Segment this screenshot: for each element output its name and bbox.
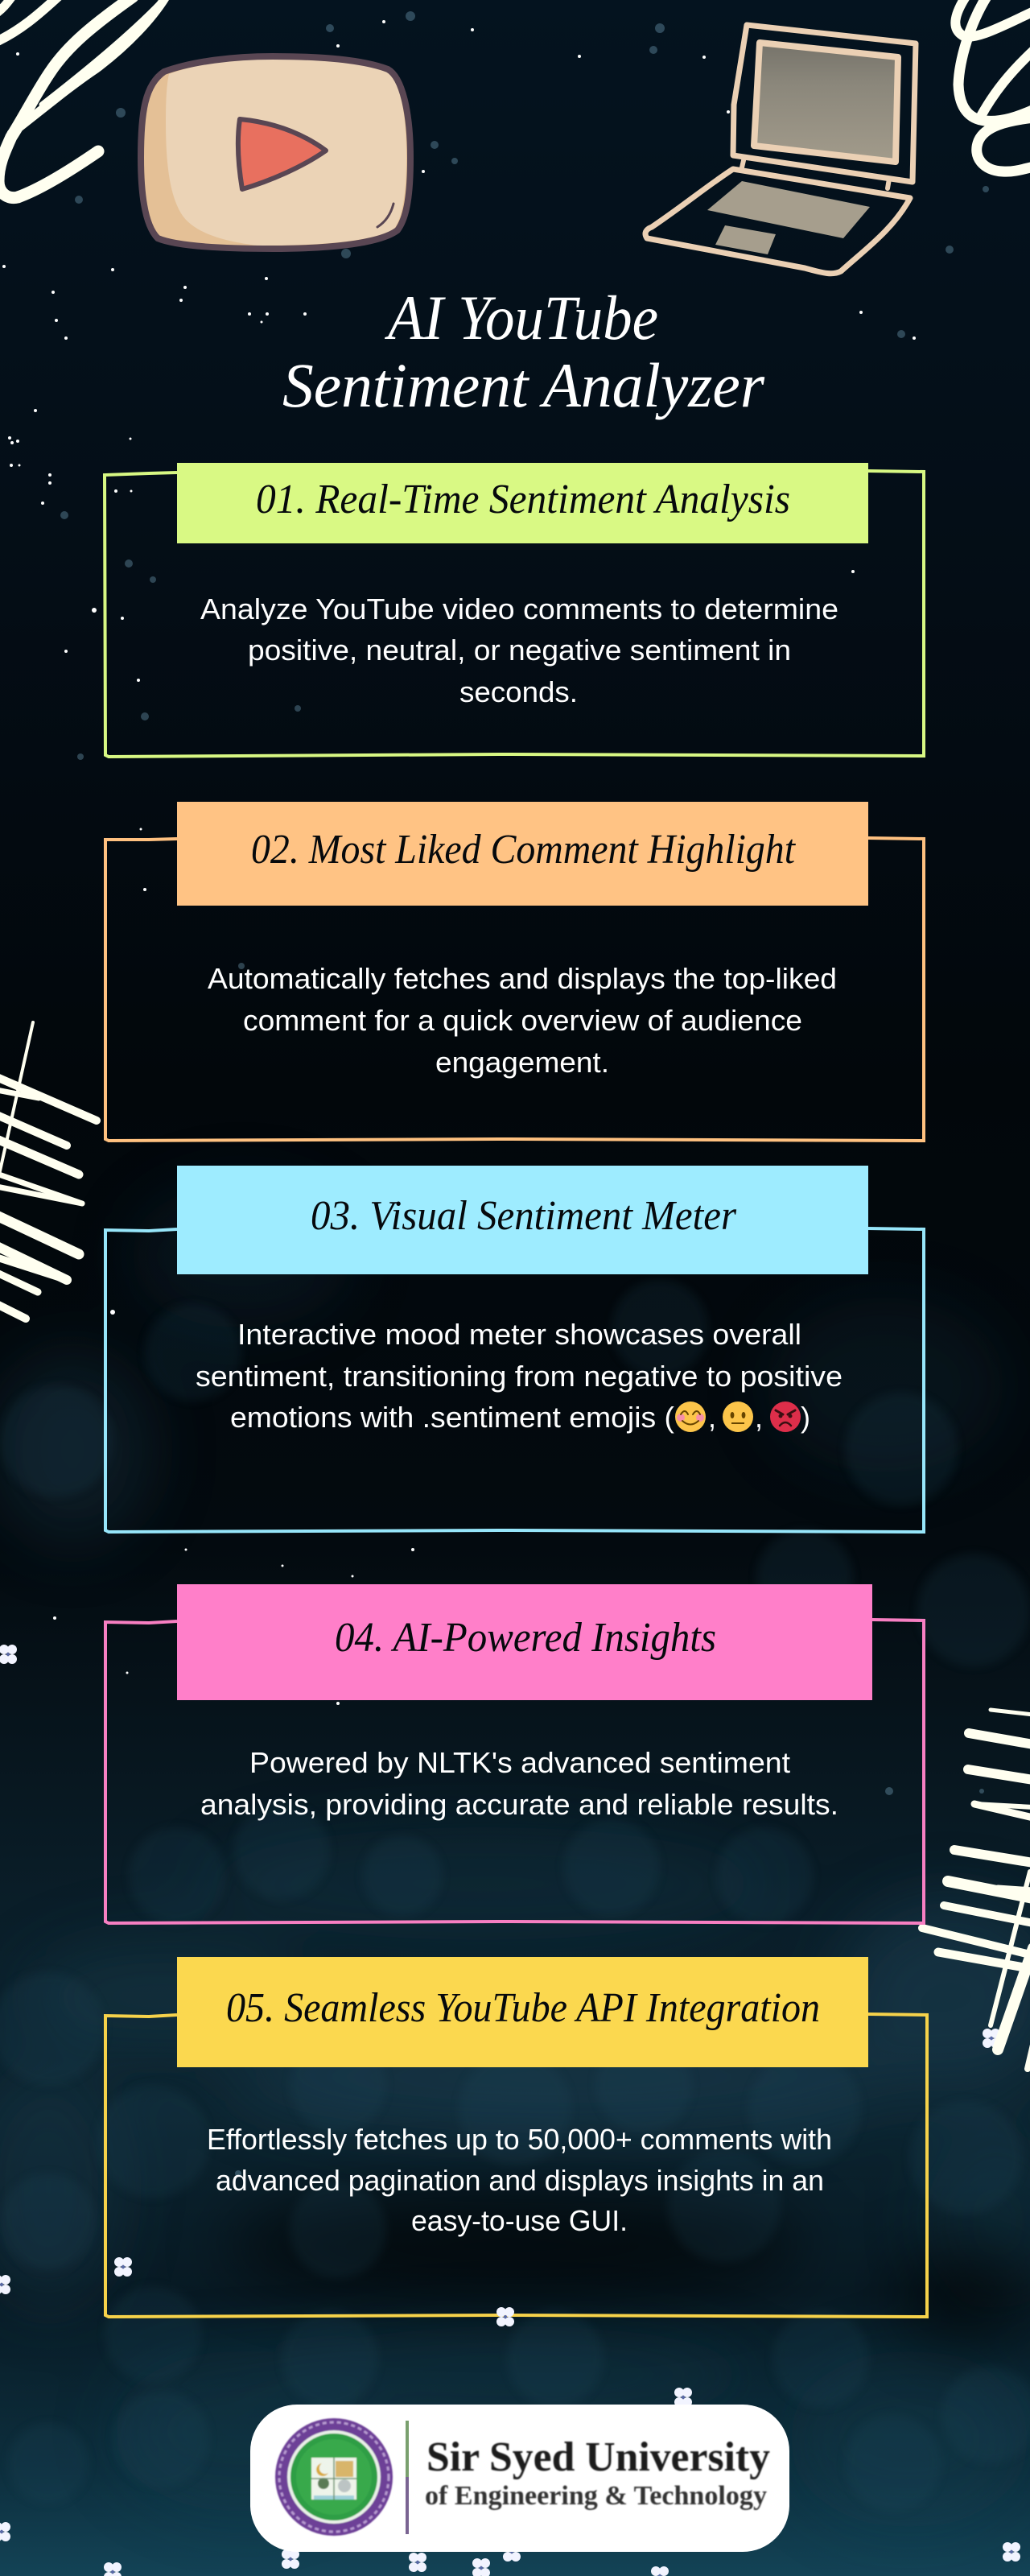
header 1 bbox=[177, 463, 868, 543]
body 1: Analyze YouTube video comments to determine bbox=[200, 592, 838, 625]
icon: YouTube play button bbox=[141, 56, 410, 249]
body 2: comment for a quick overview of audience bbox=[243, 1004, 802, 1037]
heading 3: 03. Visual Sentiment Meter bbox=[311, 1193, 737, 1239]
logo wordmark bbox=[425, 2434, 770, 2511]
header 3 bbox=[177, 1166, 868, 1274]
body 3: , bbox=[755, 1401, 763, 1434]
panel 2: Most Liked Comment Highlight bbox=[105, 802, 924, 1141]
body 3: emotions with .sentiment emojis ( bbox=[230, 1401, 674, 1434]
laptop screen bbox=[754, 43, 898, 162]
decorative scribble: top right bbox=[955, 0, 1030, 171]
icon: university seal bbox=[275, 2418, 393, 2536]
heading 2: 02. Most Liked Comment Highlight bbox=[251, 827, 796, 873]
decorative scribble: top left bbox=[0, 0, 166, 198]
header 5 bbox=[177, 1957, 868, 2067]
body 1: positive, neutral, or negative sentiment in bbox=[248, 634, 791, 667]
laptop base bbox=[645, 169, 910, 274]
body 5 bbox=[207, 2123, 832, 2237]
decorative scribble: left fan bbox=[0, 1022, 97, 1319]
body 4: Powered by NLTK's advanced sentiment bbox=[249, 1746, 790, 1779]
logo wordmark: of Engineering & Technology bbox=[425, 2481, 767, 2511]
title: Sentiment Analyzer bbox=[282, 350, 765, 420]
divider bbox=[406, 2421, 409, 2534]
body 3 bbox=[196, 1318, 843, 1434]
body 2: engagement. bbox=[435, 1046, 609, 1079]
heading 1: 01. Real-Time Sentiment Analysis bbox=[256, 477, 790, 522]
body 4 bbox=[200, 1746, 838, 1821]
body 3: sentiment, transitioning from negative to positive bbox=[196, 1360, 843, 1393]
body 2 bbox=[208, 962, 837, 1079]
decorative scribble: right fan bbox=[922, 1710, 1030, 2069]
panel 4: AI-Powered Insights bbox=[105, 1584, 924, 1923]
icon: angry emoji bbox=[770, 1402, 801, 1432]
body 3: , bbox=[708, 1401, 716, 1434]
panel 1: Real-Time Sentiment Analysis bbox=[105, 463, 924, 757]
body 2: Automatically fetches and displays the top-liked bbox=[208, 962, 837, 995]
panel 5: Seamless YouTube API Integration bbox=[105, 1957, 927, 2317]
body 5: easy-to-use GUI. bbox=[411, 2204, 628, 2237]
body 1 bbox=[200, 592, 838, 708]
body 1: seconds. bbox=[459, 675, 578, 708]
icon: play triangle bbox=[238, 119, 326, 189]
logo card: Sir Syed University bbox=[250, 2405, 789, 2552]
header 2 bbox=[177, 802, 868, 906]
body 3: ) bbox=[801, 1401, 810, 1434]
flower over panel 5 frame bbox=[496, 2307, 514, 2326]
body 5: advanced pagination and displays insights in an bbox=[216, 2164, 824, 2197]
icon: laptop bbox=[645, 25, 916, 274]
icon: neutral emoji bbox=[723, 1402, 753, 1432]
icon: smiling emoji bbox=[675, 1402, 706, 1432]
title: AI YouTube bbox=[384, 283, 658, 353]
body 3: Interactive mood meter showcases overall bbox=[237, 1318, 801, 1351]
panel 3: Visual Sentiment Meter bbox=[105, 1166, 924, 1532]
heading 4: 04. AI-Powered Insights bbox=[335, 1615, 716, 1661]
heading 5: 05. Seamless YouTube API Integration bbox=[226, 1985, 820, 2031]
body 4: analysis, providing accurate and reliable results. bbox=[200, 1788, 838, 1821]
logo wordmark: Sir Syed University bbox=[426, 2434, 770, 2480]
body 5: Effortlessly fetches up to 50,000+ comments with bbox=[207, 2123, 832, 2156]
header 4 bbox=[177, 1584, 872, 1700]
title bbox=[282, 283, 765, 420]
